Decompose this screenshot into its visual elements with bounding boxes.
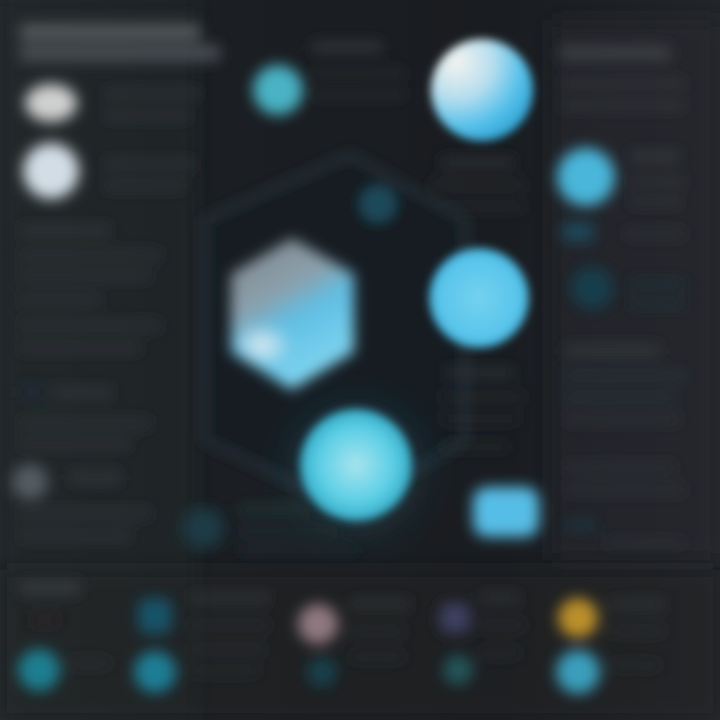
panel: bottom strip: [0, 570, 720, 720]
icon: left grey dot: [12, 464, 48, 500]
bottom card 5: [556, 598, 665, 694]
icon: top left white pill: [25, 84, 77, 122]
large sphere: bottom glow: [296, 410, 416, 530]
hexagon frame with node: [205, 155, 465, 510]
rounded blue tile: [473, 487, 539, 537]
text block: under middle sphere: [440, 368, 525, 450]
bottom card 1: [18, 582, 110, 691]
header text: center: [312, 42, 407, 98]
large sphere: bottom: [300, 409, 412, 521]
text block: center lower: [182, 506, 358, 553]
icon: top teal circle: [253, 65, 303, 115]
text block: under top sphere: [430, 158, 525, 210]
panel: right column: [552, 20, 720, 560]
large sphere: middle: [429, 248, 529, 348]
bottom card 2: [134, 594, 270, 693]
text block: right column: [565, 230, 685, 546]
title: [20, 24, 220, 61]
text block: left column lower: [20, 386, 150, 539]
icon: right dark teal marks: [562, 222, 613, 309]
text block: right of blue circle: [630, 152, 685, 205]
header text: right: [560, 46, 685, 109]
central hexagon: [231, 238, 354, 390]
bottom card 3: [298, 600, 410, 687]
large sphere: top: [431, 39, 533, 141]
icon: right blue circle: [557, 148, 615, 206]
bottom card 4: [440, 594, 525, 685]
text block: left column upper: [20, 90, 200, 351]
panel: left column: [0, 0, 195, 720]
icon: left pale circle: [23, 143, 79, 199]
